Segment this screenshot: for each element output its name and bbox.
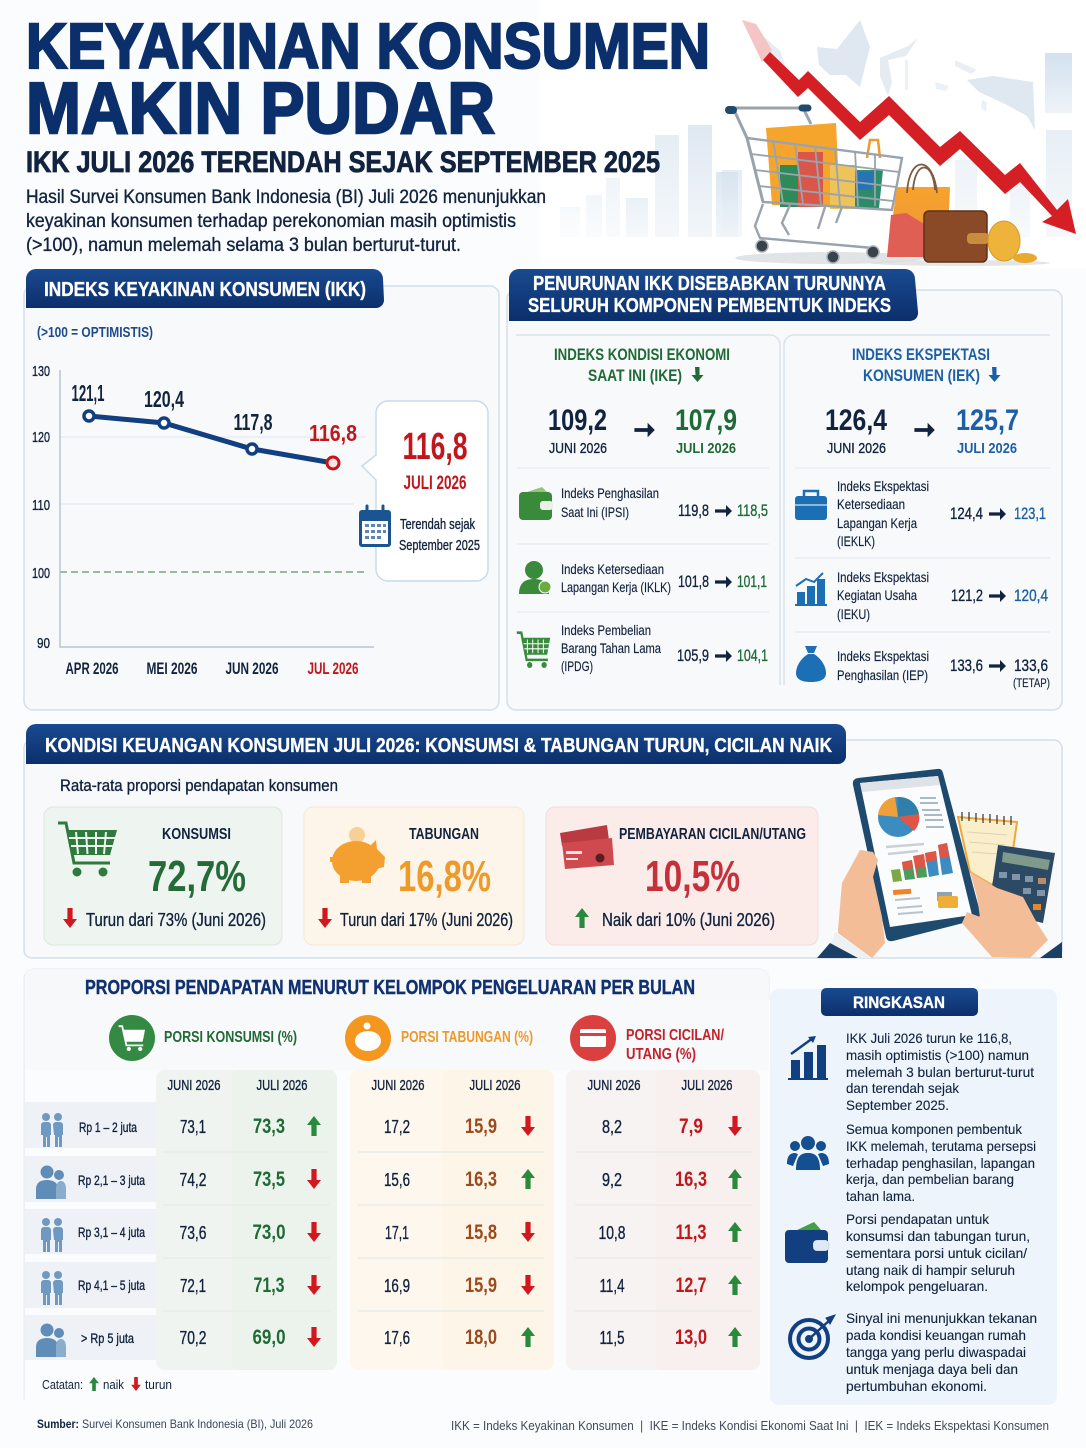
icon: growth chart: [788, 1036, 828, 1080]
icon: business chart: [795, 573, 827, 606]
table column headers: JUNI 2026: [372, 1078, 424, 1094]
line chart: [32, 363, 374, 678]
row: Rp 1-2 juta: [25, 1102, 742, 1148]
line chart: MEI 2026: [146, 659, 198, 678]
row: IPSI: Indeks Penghasilan: [561, 485, 659, 501]
row: IPDG: Barang Tahan Lama: [561, 640, 661, 656]
row: IEKLK: (IEKLK): [837, 533, 875, 549]
heading: IKK: INDEKS KEYAKINAN KONSUMEN (IKK): [44, 279, 366, 301]
icon: cart: [58, 823, 117, 876]
card: tabungan: 16,8%: [398, 852, 491, 901]
summary item 3: utang naik di hampir seluruh: [846, 1262, 1015, 1278]
card: tabungan: [304, 807, 524, 945]
row: IPSI: 118,5: [737, 501, 768, 520]
sub-panel: IKE: 107,9: [675, 404, 737, 437]
shopping cart: [729, 108, 902, 263]
sub-panel: IEK: [795, 345, 1050, 690]
row: IEKLK: Lapangan Kerja: [837, 515, 917, 531]
row: Rp 4,1-5 juta: 16,9: [384, 1276, 410, 1296]
card: konsumsi: Turun dari 73% (Juni 2026): [86, 910, 266, 930]
column heading: tabungan: [345, 1015, 533, 1061]
row: IEKU: [795, 569, 1048, 622]
row: IPSI: [519, 485, 768, 520]
row: IEP: 133,6: [950, 656, 983, 675]
card: tabungan: TABUNGAN: [409, 826, 479, 843]
row: Rp 1-2 juta: 15,9: [465, 1115, 497, 1138]
row: Rp 4,1-5 juta: [25, 1262, 742, 1308]
icon: calendar: [359, 506, 391, 547]
icon: credit cards: [560, 825, 614, 869]
note: optimistis threshold: (>100 = OPTIMISTIS): [37, 325, 153, 341]
row: Rp 3,1-4 juta: [25, 1209, 742, 1254]
summary item 2: tahan lama.: [846, 1188, 915, 1204]
summary item 3: [785, 1211, 1030, 1294]
title: [26, 10, 710, 149]
row: IEP: 133,6: [1014, 656, 1048, 675]
row: Rp 1-2 juta: 73,1: [180, 1117, 206, 1137]
icon: cart: [517, 633, 550, 668]
line chart: 117,8: [234, 409, 273, 435]
sub-panel: IKE: SAAT INI (IKE): [588, 366, 682, 385]
row: IEKLK: [795, 478, 1046, 549]
hero illustration: skyline, map, falling arrow, cart, bags, wallet: [540, 0, 1086, 268]
abbreviations legend: IKK = Indeks Keyakinan Konsumen | IKE = Indeks Kondisi Ekonomi Saat Ini | IEK = Indeks Ekspektasi Konsumen: [451, 1419, 1049, 1433]
row: Rp 2,1-3 juta: 73,5: [253, 1168, 285, 1191]
summary item 2: Semua komponen pembentuk: [846, 1121, 1023, 1137]
sub-panel: IKE: 109,2: [548, 404, 607, 437]
row: Rp 1-2 juta: 73,3: [253, 1115, 285, 1138]
summary item 3: Porsi pendapatan untuk: [846, 1211, 990, 1227]
heading: components: [509, 269, 918, 321]
sub-panel: IEK: KONSUMEN (IEK): [863, 366, 980, 385]
callout: latest value: September 2025: [399, 537, 480, 554]
summary item 1: masih optimistis (>100) namun: [846, 1047, 1029, 1063]
callout: latest value: Terendah sejak: [400, 516, 475, 533]
heading: financial condition: KONDISI KEUANGAN KONSUMEN JULI 2026: KONSUMSI & TABUNGAN TURUN, CICILAN NAIK: [45, 735, 832, 757]
row: IKLK: 101,1: [737, 572, 767, 591]
row: IEP: Indeks Ekspektasi: [837, 648, 929, 664]
icon: wallet: [785, 1222, 829, 1263]
row: Rp 4,1-5 juta: 12,7: [676, 1274, 706, 1297]
heading: components: SELURUH KOMPONEN PEMBENTUK INDEKS: [528, 295, 891, 317]
source note: Survei Konsumen Bank Indonesia (BI), Juli 2026: [82, 1417, 313, 1431]
row: Rp 4,1-5 juta: 15,9: [465, 1274, 497, 1297]
panel: summary: [770, 988, 1057, 1405]
wallet and coins: [924, 211, 1037, 263]
card: konsumsi: 72,7%: [148, 852, 246, 901]
icon: money bag: [796, 646, 826, 682]
summary item 3: konsumsi dan tabungan turun,: [846, 1228, 1030, 1244]
row: Rp 4,1-5 juta: 72,1: [180, 1276, 206, 1296]
title: MAKIN PUDAR: [26, 69, 495, 149]
row: Rp 2,1-3 juta: 9,2: [602, 1170, 622, 1190]
row: IPSI: 119,8: [678, 501, 709, 520]
summary item 3: sementara porsi untuk cicilan/: [846, 1245, 1027, 1261]
callout: latest value: 116,8: [402, 426, 468, 468]
shopping bag: [887, 164, 950, 257]
intro paragraph: Hasil Survei Konsumen Bank Indonesia (BI) Juli 2026 menunjukkan: [26, 187, 546, 208]
sub-panel: IEK: 125,7: [956, 404, 1019, 437]
heading: summary: [821, 988, 978, 1016]
line chart: 116,8: [309, 420, 357, 446]
subtitle: IKK JULI 2026 TERENDAH SEJAK SEPTEMBER 2025: [26, 146, 660, 179]
summary item 2: kerja, dan pembelian barang: [846, 1171, 1014, 1187]
row: Rp 2,1-3 juta: 74,2: [180, 1170, 206, 1190]
line chart: 110: [32, 497, 50, 514]
row: above Rp 5 juta: 70,2: [180, 1328, 206, 1348]
callout: latest value: JULI 2026: [404, 473, 466, 494]
row: IEKLK: Indeks Ekspektasi: [837, 478, 929, 494]
row: IKLK: Lapangan Kerja (IKLK): [561, 579, 671, 595]
source note: Sumber:: [37, 1417, 79, 1431]
intro paragraph: (>100), namun melemah selama 3 bulan berturut-turut.: [26, 235, 461, 256]
line chart: JUL 2026: [308, 659, 358, 678]
row: IEKU: 120,4: [1014, 586, 1048, 605]
summary item 4: tangga yang perlu diwaspadai: [846, 1344, 1026, 1360]
row: IKLK: Indeks Ketersediaan: [561, 561, 664, 577]
row: Rp 4,1-5 juta: Rp 4,1 – 5 juta: [78, 1277, 145, 1293]
icon: wallet: [519, 487, 553, 520]
icon: piggy bank: [330, 827, 385, 883]
row: Rp 1-2 juta: 7,9: [679, 1115, 703, 1138]
row: IEKLK: Ketersediaan: [837, 496, 905, 512]
icon: target: [790, 1315, 835, 1358]
row: IEP: Penghasilan (IEP): [837, 667, 928, 683]
heading: components: PENURUNAN IKK DISEBABKAN TURUNNYA: [533, 273, 886, 295]
sub-panel: IEK: INDEKS EKSPEKTASI: [852, 345, 990, 364]
heading: summary: RINGKASAN: [853, 993, 945, 1012]
summary item 2: terhadap penghasilan, lapangan: [846, 1155, 1035, 1171]
summary item 4: Sinyal ini menunjukkan tekanan: [846, 1310, 1037, 1326]
row: IEP: [796, 646, 1050, 690]
legend note: turun: [145, 1378, 172, 1392]
line chart: 130: [32, 363, 50, 380]
subheading: Rata-rata proporsi pendapatan konsumen: [60, 777, 338, 795]
summary item 3: kelompok pengeluaran.: [846, 1278, 988, 1294]
table column headers: JULI 2026: [256, 1078, 308, 1094]
summary item 2: [787, 1121, 1036, 1204]
table column headers: JULI 2026: [682, 1078, 732, 1094]
row: Rp 2,1-3 juta: Rp 2,1 – 3 juta: [78, 1172, 145, 1188]
row: IKLK: [519, 561, 767, 595]
row: Rp 3,1-4 juta: Rp 3,1 – 4 juta: [78, 1224, 145, 1240]
row: Rp 2,1-3 juta: 16,3: [675, 1168, 707, 1191]
card: cicilan: Naik dari 10% (Juni 2026): [602, 910, 775, 930]
row: Rp 1-2 juta: 17,2: [384, 1117, 410, 1137]
row: IEP: (TETAP): [1013, 678, 1050, 690]
row: IEKLK: 123,1: [1014, 504, 1046, 523]
card: konsumsi: [44, 807, 282, 945]
line chart: 120,4: [144, 386, 184, 412]
row: IPDG: 105,9: [677, 646, 709, 665]
icon: briefcase: [795, 491, 827, 520]
row: Rp 4,1-5 juta: 11,4: [600, 1276, 624, 1296]
column heading: cicilan: UTANG (%): [626, 1046, 696, 1063]
sub-panel: IKE: INDEKS KONDISI EKONOMI: [554, 345, 730, 364]
row: IPDG: 104,1: [737, 646, 768, 665]
row: Rp 1-2 juta: Rp 1 – 2 juta: [79, 1119, 137, 1135]
row: above Rp 5 juta: 17,6: [384, 1328, 410, 1348]
sub-panel: IEK: JUNI 2026: [827, 440, 886, 457]
row: Rp 2,1-3 juta: [25, 1156, 742, 1202]
column heading: konsumsi: PORSI KONSUMSI (%): [164, 1029, 297, 1046]
intro paragraph: keyakinan konsumen terhadap perekonomian masih optimistis: [26, 211, 516, 232]
row: IEKU: 121,2: [951, 586, 983, 605]
icon: people: [787, 1136, 829, 1170]
line chart: APR 2026: [66, 659, 118, 678]
row: Rp 3,1-4 juta: 15,8: [465, 1221, 497, 1244]
line chart: 120: [32, 429, 50, 446]
panel: income proportion table: [24, 969, 769, 1400]
icon: worker: [519, 561, 551, 594]
column heading: cicilan: PORSI CICILAN/: [626, 1027, 724, 1044]
heading: IKK: [26, 269, 384, 308]
row: above Rp 5 juta: 13,0: [675, 1326, 707, 1349]
panel: financial condition: [24, 724, 1062, 958]
row: IPDG: (IPDG): [561, 658, 593, 674]
heading: table: PROPORSI PENDAPATAN MENURUT KELOMPOK PENGELUARAN PER BULAN: [85, 977, 695, 999]
card: cicilan: 10,5%: [645, 852, 740, 901]
title: KEYAKINAN KONSUMEN: [26, 10, 710, 82]
column heading: konsumsi: [109, 1015, 297, 1061]
sub-panel: IEK: JULI 2026: [957, 440, 1017, 457]
row: above Rp 5 juta: 11,5: [600, 1328, 624, 1348]
intro paragraph: [26, 187, 546, 256]
card: cicilan: [546, 807, 818, 945]
line chart: JUN 2026: [226, 659, 278, 678]
row: above Rp 5 juta: 69,0: [252, 1326, 286, 1349]
line chart: 100: [32, 565, 50, 582]
sub-panel: IEK: 126,4: [825, 404, 887, 437]
card: konsumsi: KONSUMSI: [162, 826, 231, 843]
legend note: [42, 1377, 172, 1392]
table column headers: JULI 2026: [470, 1078, 520, 1094]
card: cicilan: PEMBAYARAN CICILAN/UTANG: [619, 826, 806, 843]
summary item 2: IKK melemah, terutama persepsi: [846, 1138, 1036, 1154]
table column headers: JUNI 2026: [588, 1078, 640, 1094]
row: Rp 3,1-4 juta: 17,1: [385, 1223, 409, 1243]
panel: IKK line chart: [24, 269, 499, 710]
row: above Rp 5 juta: 18,0: [465, 1326, 497, 1349]
table column headers: JUNI 2026: [168, 1078, 220, 1094]
row: IPDG: [517, 622, 768, 674]
summary item 4: pada kondisi keuangan rumah: [846, 1327, 1026, 1343]
column heading: cicilan: [570, 1015, 724, 1063]
sub-panel: IKE: [517, 345, 769, 674]
summary item 4: [790, 1310, 1037, 1394]
column heading: tabungan: PORSI TABUNGAN (%): [401, 1029, 533, 1046]
line chart: 90: [37, 635, 50, 652]
row: Rp 3,1-4 juta: 73,0: [252, 1221, 286, 1244]
row: IKLK: 101,8: [678, 572, 709, 591]
illustration: hands holding tablet, notepad, calculator: [817, 769, 1062, 958]
row: above Rp 5 juta: [25, 1315, 742, 1360]
sub-panel: IKE: JUNI 2026: [549, 440, 607, 457]
sub-panel: IKE: JULI 2026: [676, 440, 736, 457]
table column headers: [168, 1078, 732, 1094]
summary item 4: pertumbuhan ekonomi.: [846, 1378, 987, 1394]
row: Rp 3,1-4 juta: 10,8: [598, 1223, 626, 1243]
heading: financial condition: [26, 724, 846, 764]
falling red arrow: [742, 20, 1076, 234]
legend note: Catatan:: [42, 1378, 83, 1392]
summary item 4: untuk menjaga daya beli dan: [846, 1361, 1018, 1377]
panel: IKK components: [507, 269, 1062, 710]
row: Rp 3,1-4 juta: 11,3: [676, 1221, 706, 1244]
row: Rp 3,1-4 juta: 73,6: [180, 1223, 206, 1243]
row: IPDG: Indeks Pembelian: [561, 622, 651, 638]
row: IEKU: (IEKU): [837, 606, 870, 622]
table backgrounds: [156, 1070, 760, 1370]
summary item 1: dan terendah sejak: [846, 1080, 960, 1096]
row: Rp 4,1-5 juta: 71,3: [254, 1274, 284, 1297]
row: above Rp 5 juta: > Rp 5 juta: [81, 1330, 134, 1346]
summary item 1: September 2025.: [846, 1097, 949, 1113]
row: IEKU: Kegiatan Usaha: [837, 587, 917, 603]
row: IEKU: Indeks Ekspektasi: [837, 569, 929, 585]
card: tabungan: Turun dari 17% (Juni 2026): [340, 910, 513, 930]
row: Rp 2,1-3 juta: 15,6: [384, 1170, 410, 1190]
legend note: naik: [103, 1378, 125, 1392]
row: Rp 1-2 juta: 8,2: [602, 1117, 622, 1137]
summary item 1: [788, 1030, 1034, 1113]
summary item 1: melemah 3 bulan berturut-turut: [846, 1064, 1034, 1080]
row: IEKLK: 124,4: [950, 504, 983, 523]
callout: latest value: [359, 401, 488, 581]
row: Rp 2,1-3 juta: 16,3: [465, 1168, 497, 1191]
line chart: 121,1: [72, 380, 105, 406]
row: IPSI: Saat Ini (IPSI): [561, 504, 629, 520]
summary item 1: IKK Juli 2026 turun ke 116,8,: [846, 1030, 1012, 1046]
